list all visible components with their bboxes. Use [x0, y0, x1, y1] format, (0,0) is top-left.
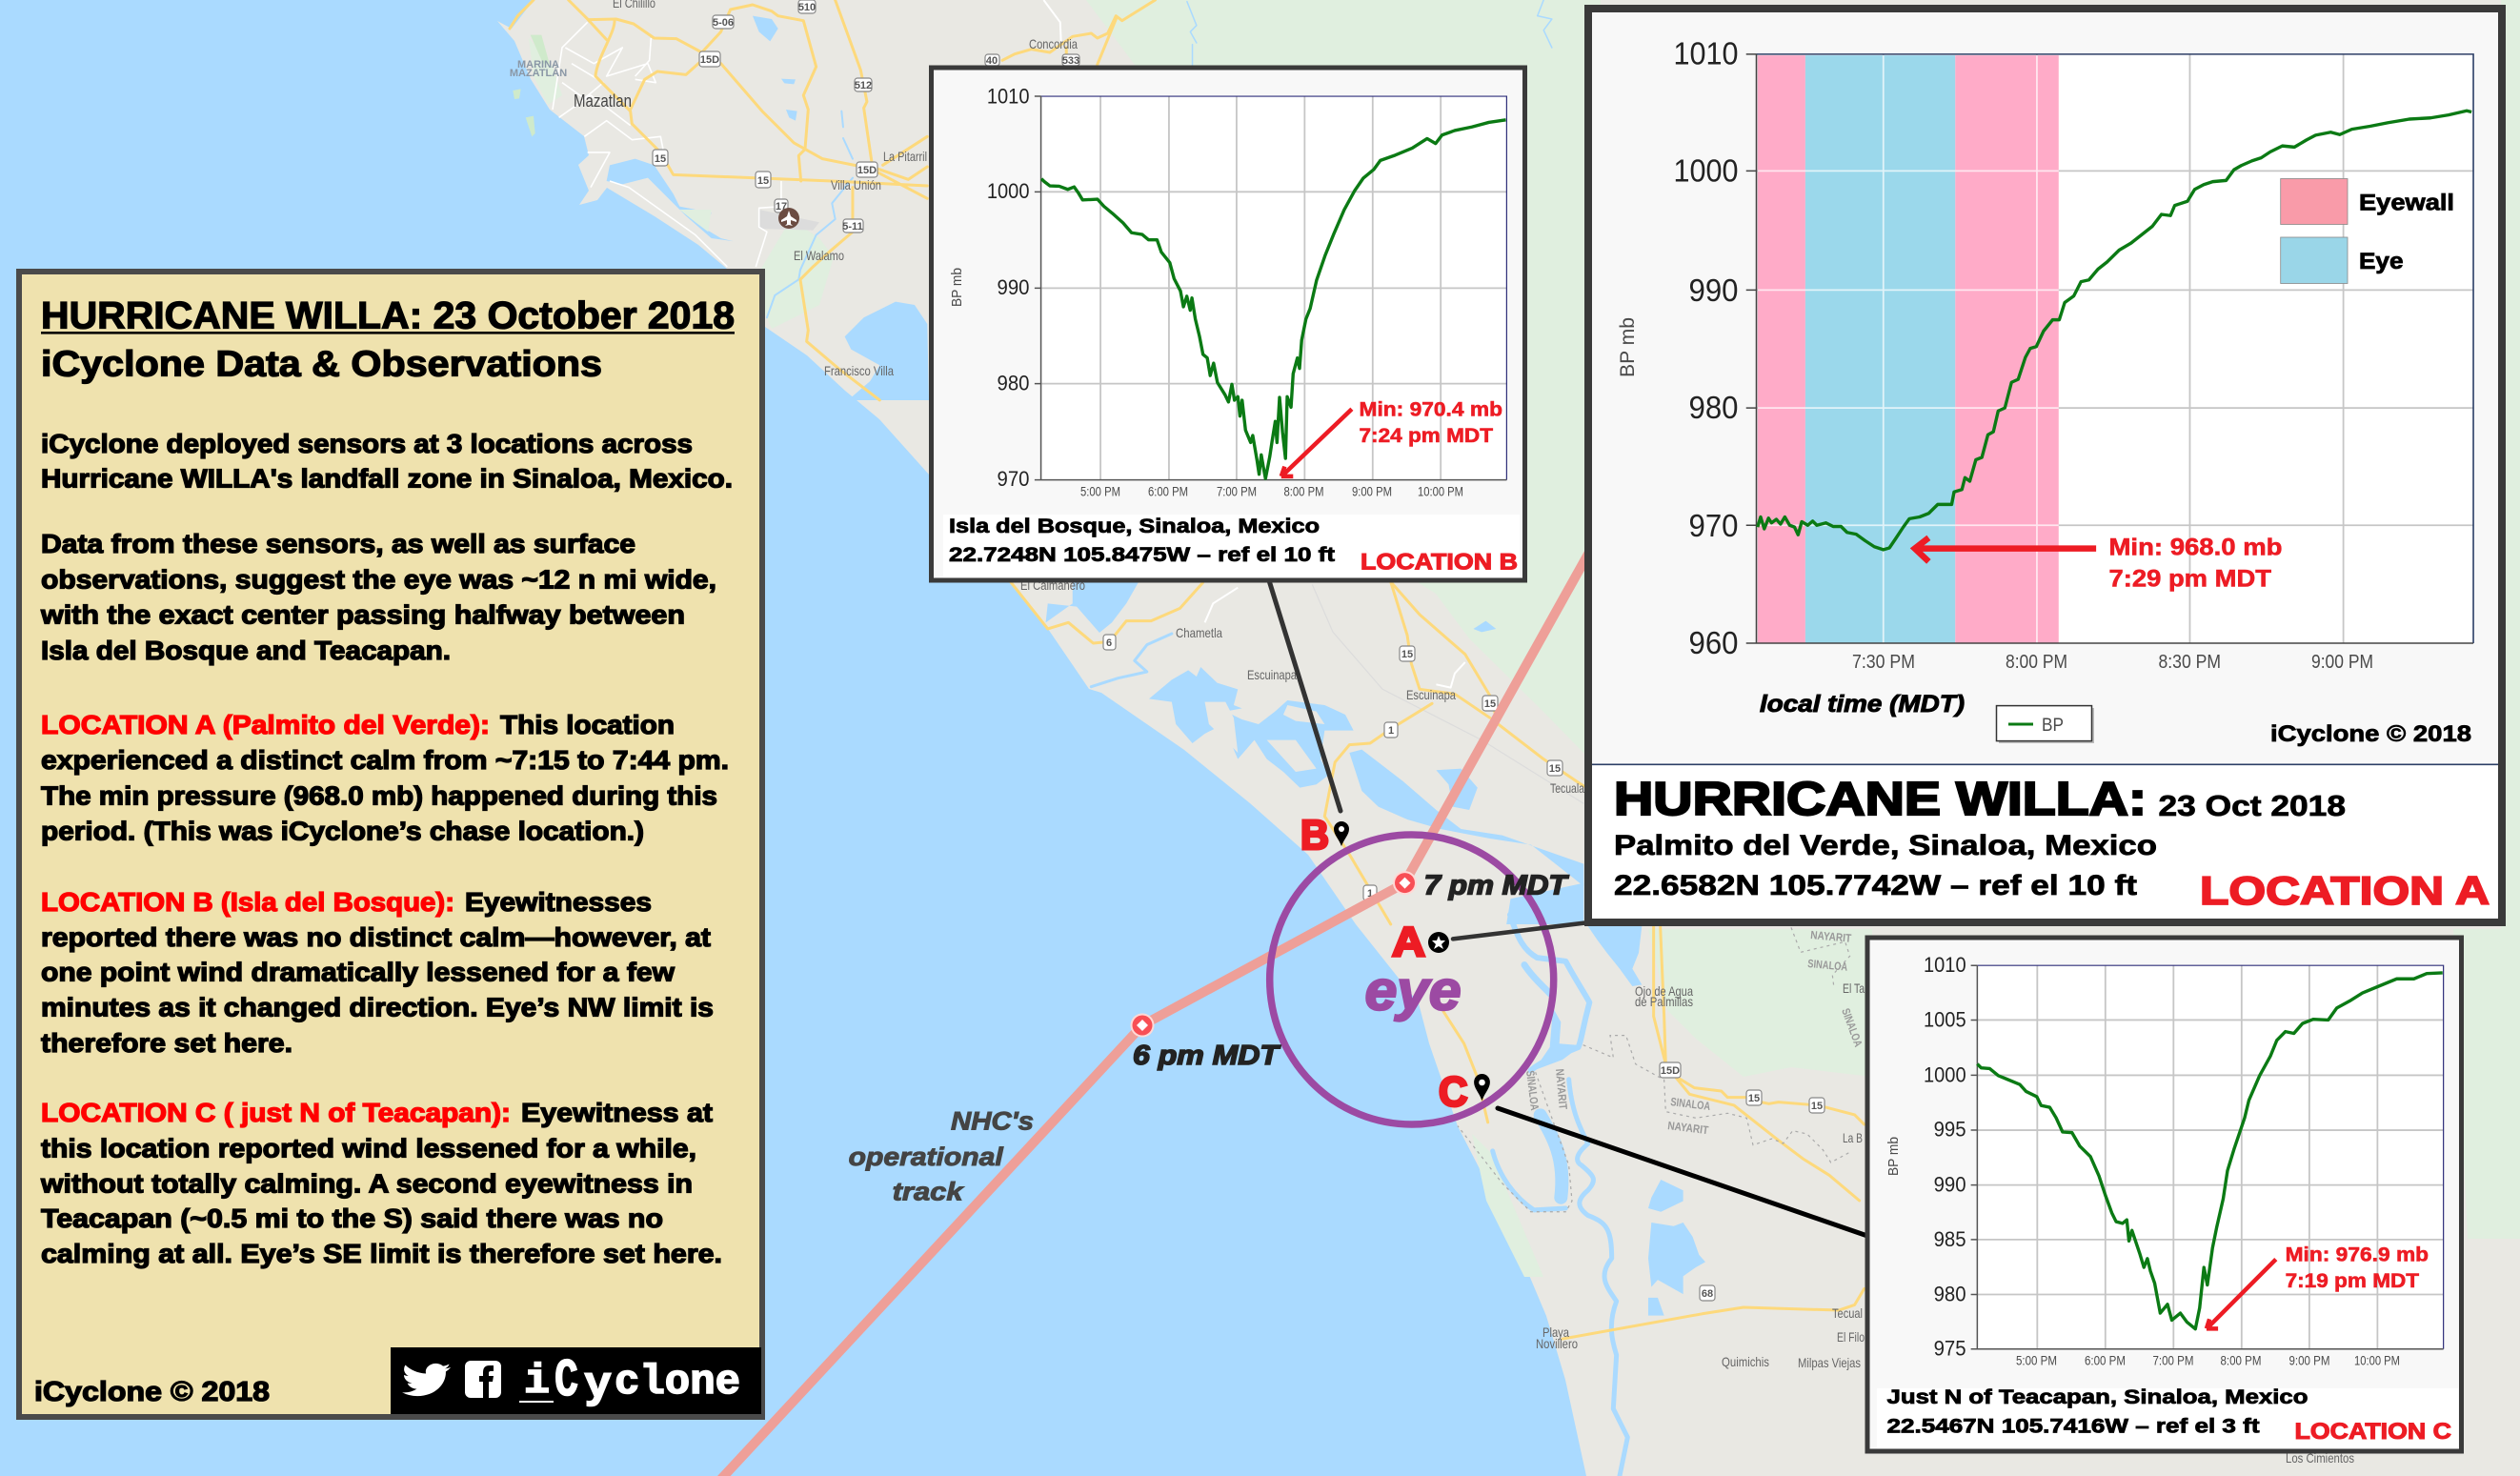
x axis labels: 10:00 PM	[1418, 484, 1463, 499]
location C paragraph: LOCATION C ( just N of Teacapan):	[41, 1098, 511, 1127]
x axis labels	[1080, 484, 1463, 499]
location C paragraph: this location reported wind lessened for a while,	[41, 1134, 696, 1163]
map place labels: Tecuala	[1550, 780, 1584, 796]
location C marker: C	[1439, 1069, 1467, 1116]
map place labels: El Caimanero	[1020, 577, 1085, 593]
map place labels: Concordia	[1029, 36, 1078, 51]
map place labels: Playa	[1542, 1324, 1569, 1340]
location B paragraph	[41, 887, 714, 1058]
location B marker: B	[1300, 812, 1329, 859]
legend: eye	[2281, 237, 2403, 284]
x axis labels: 8:00 PM	[2220, 1353, 2262, 1368]
location B paragraph: one point wind dramatically lessened for a few	[41, 957, 675, 987]
arrow to minimum	[1915, 537, 2096, 561]
minimum pressure callout: Min: 968.0 mb	[2109, 534, 2283, 560]
map place labels: SINALOA	[1523, 1070, 1542, 1111]
chart title: HURRICANE WILLA:	[1614, 774, 2147, 825]
highway shields: 510	[798, 2, 816, 13]
y axis labels	[987, 84, 1029, 491]
y axis labels: 995	[1934, 1118, 1966, 1142]
map roads: Concordia area	[1002, 0, 1552, 65]
x axis labels: 5:00 PM	[1080, 484, 1120, 499]
panel: location C chart	[1867, 938, 2462, 1451]
chart title	[1614, 774, 2346, 825]
y axis labels	[1924, 953, 1966, 1361]
y axis labels: 1010	[1924, 953, 1966, 977]
station caption	[1886, 1386, 2308, 1438]
map place labels: SINALOA	[1807, 957, 1848, 974]
location C paragraph: Teacapan (~0.5 mi to the S) said there was no	[41, 1203, 663, 1233]
intro paragraph	[41, 429, 733, 494]
station caption: Isla del Bosque, Sinaloa, Mexico	[949, 516, 1320, 537]
highway shields: 15	[1811, 1101, 1823, 1112]
eyewall band	[1955, 55, 2059, 643]
map place labels: Chametla	[1176, 625, 1222, 640]
highway shields: 15	[1748, 1093, 1760, 1104]
eyewall band	[1758, 55, 1805, 643]
map place labels: NAYARIT	[1810, 928, 1852, 945]
eye size paragraph	[40, 529, 716, 665]
y axis labels: 980	[997, 372, 1029, 394]
legend: eyewall	[2281, 179, 2454, 225]
highway shields: 15D	[700, 54, 719, 66]
highway shields: 40	[986, 55, 998, 67]
x axis title: local time (MDT)	[1760, 691, 1965, 718]
y axis title: BP mb	[1886, 1137, 1902, 1176]
label: 7 pm MDT: 7 pm MDT	[1424, 871, 1569, 901]
eye size paragraph: Isla del Bosque and Teacapan.	[41, 636, 451, 665]
icon: twitter bird	[402, 1364, 451, 1396]
x axis labels: 8:30 PM	[2159, 652, 2221, 673]
y axis labels: 970	[1688, 508, 1738, 543]
map place labels: El Walamo	[794, 248, 844, 263]
panel title: HURRICANE WILLA: 23 October 2018	[41, 295, 735, 337]
label: 6 pm MDT: 6 pm MDT	[1133, 1041, 1281, 1071]
panel: iCyclone data and observations	[19, 272, 762, 1417]
minimum pressure callout	[2109, 534, 2283, 593]
y axis labels: 960	[1688, 625, 1738, 660]
y axis labels: 1010	[987, 84, 1029, 109]
minimum pressure callout: 7:29 pm MDT	[2109, 566, 2271, 593]
minimum pressure callout: Min: 970.4 mb	[1359, 399, 1502, 421]
highway shields: 15	[757, 175, 769, 187]
chart legend: BP	[1997, 706, 2094, 743]
icon: facebook	[465, 1361, 501, 1398]
intro paragraph: Hurricane WILLA's landfall zone in Sinaloa, Mexico.	[41, 463, 733, 494]
location A marker: A	[1392, 919, 1425, 965]
minimum pressure callout	[1359, 399, 1502, 447]
x axis labels: 9:00 PM	[1352, 484, 1392, 499]
location A tag: LOCATION A	[2200, 868, 2490, 913]
label: NHC's operational track: track	[893, 1178, 965, 1206]
chart copyright: iCyclone © 2018	[2270, 721, 2471, 747]
x axis labels: 7:00 PM	[1217, 484, 1257, 499]
map place labels: MARINA	[517, 59, 559, 71]
leader line to location B	[1268, 577, 1341, 811]
plot area	[1971, 965, 2444, 1349]
map place labels: Escuinapa	[1247, 667, 1297, 682]
chart legend: BP: BP	[2042, 716, 2064, 736]
eye circle	[1270, 835, 1554, 1124]
highway shields: 1	[1367, 888, 1373, 900]
location B paragraph: therefore set here.	[41, 1028, 292, 1058]
copyright: iCyclone © 2018	[34, 1377, 270, 1407]
y axis labels: 1000	[1924, 1062, 1966, 1086]
water: Nayarit rivers and lakes	[1443, 915, 1865, 1476]
highway shields: 1	[1388, 725, 1394, 737]
iCyclone wordmark: y	[584, 1361, 612, 1410]
highway shields: 15	[655, 153, 666, 165]
station caption: 22.6582N 105.7742W – ref el 10 ft	[1614, 870, 2137, 901]
station caption: 22.5467N 105.7416W – ref el 3 ft	[1886, 1416, 2260, 1438]
highway shields: 512	[855, 80, 872, 91]
map place labels: La Pitarril	[883, 149, 927, 164]
minimum pressure callout: 7:24 pm MDT	[1359, 425, 1493, 447]
station caption: Palmito del Verde, Sinaloa, Mexico	[1614, 830, 2157, 861]
map place labels	[510, 0, 2354, 1466]
marker: 6 pm track point	[1130, 1014, 1155, 1037]
y axis labels: 1005	[1924, 1008, 1966, 1031]
y axis labels	[1673, 36, 1738, 660]
map roads: Mazatlan area	[510, 0, 927, 400]
eye size paragraph: observations, suggest the eye was ~12 n mi wide,	[41, 564, 716, 595]
label: eye: eye	[1365, 960, 1462, 1021]
highway shields: 15D	[857, 165, 877, 176]
y axis labels: 985	[1934, 1227, 1966, 1251]
highway shields: 5-06	[713, 17, 734, 29]
y axis labels: 1000	[1673, 153, 1738, 189]
y axis labels: 970	[997, 467, 1029, 491]
map place labels: de Palmillas	[1635, 994, 1693, 1009]
location C paragraph: without totally calming. A second eyewitness in	[40, 1169, 693, 1199]
y axis title: BP mb	[1617, 317, 1639, 377]
map place labels: Tecual	[1832, 1305, 1863, 1321]
location B paragraph: LOCATION B (Isla del Bosque):	[41, 887, 454, 917]
y axis labels: 990	[997, 275, 1029, 299]
location C paragraph: calming at all. Eye’s SE limit is therefore set here.	[41, 1239, 722, 1268]
legend: eyewall: Eyewall	[2359, 191, 2454, 216]
x axis labels	[1852, 652, 2373, 673]
highway shields: 15	[1549, 763, 1561, 775]
station caption	[1614, 830, 2157, 901]
location B paragraph: Eyewitnesses	[465, 887, 652, 917]
x axis labels: 9:00 PM	[2288, 1353, 2330, 1368]
map place labels: NAYARIT	[1667, 1119, 1710, 1137]
highway shields: 6	[1106, 637, 1112, 649]
x axis labels: 9:00 PM	[2311, 652, 2373, 673]
y axis labels: 980	[1688, 390, 1738, 425]
map place labels: SINALOA	[1670, 1095, 1711, 1113]
y axis labels: 975	[1934, 1337, 1966, 1361]
arrow to minimum	[2207, 1260, 2276, 1328]
plot area	[1746, 54, 2473, 643]
highway shields: 68	[1702, 1288, 1713, 1300]
highway shields	[653, 0, 1824, 1301]
forest terrain	[529, 0, 2520, 1277]
x axis labels: 6:00 PM	[2085, 1353, 2126, 1368]
location B tag: LOCATION B	[1361, 549, 1518, 576]
water: Escuinapa lagoons	[1011, 582, 1583, 924]
marker: 7 pm track point	[1393, 871, 1417, 895]
leader line to location A	[1453, 922, 1589, 939]
map place labels: Novillero	[1536, 1336, 1578, 1351]
location C tag: LOCATION C	[2294, 1419, 2451, 1445]
x axis labels: 8:00 PM	[1284, 484, 1324, 499]
highway shields: 15	[1484, 698, 1496, 710]
icon: airport	[778, 208, 799, 229]
highway shields: 533	[1062, 55, 1079, 67]
map place labels: Francisco Villa	[824, 363, 894, 378]
location C marker	[1439, 1069, 1490, 1116]
y axis labels: 1000	[987, 179, 1029, 203]
iCyclone wordmark: clone	[615, 1359, 740, 1406]
map place labels: Los Cimientos	[2286, 1450, 2354, 1466]
pressure curve	[1041, 120, 1505, 478]
map place labels: Mazatlan	[574, 91, 632, 111]
map place labels: NAYARIT	[1553, 1068, 1570, 1111]
x axis labels: 7:00 PM	[2153, 1353, 2193, 1368]
x axis labels: 7:30 PM	[1852, 652, 1915, 673]
station caption: 22.7248N 105.8475W – ref el 10 ft	[949, 544, 1335, 566]
map place labels: Escuinapa	[1406, 687, 1456, 702]
minimum pressure callout: 7:19 pm MDT	[2286, 1270, 2419, 1292]
map roads: east of the lagoon	[1583, 926, 1865, 1201]
map place labels: MAZATLÁN	[510, 67, 567, 79]
highway shields: 5-11	[842, 221, 863, 233]
location C paragraph	[40, 1098, 722, 1268]
map place labels: Milpas Viejas	[1798, 1355, 1861, 1370]
social logo bar	[391, 1347, 761, 1414]
eye band	[1805, 55, 1955, 643]
y axis labels: 990	[1934, 1172, 1966, 1196]
location A marker	[1392, 919, 1449, 965]
y axis labels: 1010	[1673, 36, 1738, 71]
station caption	[949, 516, 1335, 566]
iCyclone wordmark: i	[524, 1358, 550, 1405]
iCyclone wordmark: C	[554, 1350, 578, 1411]
leader line to location C	[1498, 1108, 1867, 1236]
x axis labels: 5:00 PM	[2016, 1353, 2057, 1368]
map place labels: La B	[1843, 1130, 1863, 1145]
panel: location A chart	[1588, 9, 2502, 922]
map place labels: SINALOA	[1839, 1006, 1865, 1049]
x axis labels: 8:00 PM	[2006, 652, 2067, 673]
label: NHC's operational track: NHC's	[951, 1107, 1034, 1136]
x axis labels	[2016, 1353, 2400, 1368]
map place labels: Quimichis	[1722, 1354, 1769, 1369]
label: NHC's operational track	[849, 1107, 1034, 1206]
chart title: 23 Oct 2018	[2159, 789, 2346, 822]
y axis labels: 980	[1934, 1283, 1966, 1305]
plot area	[1035, 96, 1506, 480]
highway shields: 17	[776, 201, 787, 212]
panel: location B chart	[932, 68, 1524, 580]
panel subtitle: iCyclone Data & Observations	[41, 344, 602, 384]
map place labels: El Filo	[1837, 1329, 1865, 1345]
pressure curve	[1758, 111, 2471, 550]
pressure curve	[1977, 973, 2443, 1329]
eye size paragraph: Data from these sensors, as well as surface	[41, 529, 635, 558]
minimum pressure callout	[2286, 1243, 2429, 1292]
map place labels: Ojo de Agua	[1635, 983, 1693, 999]
x axis labels: 10:00 PM	[2354, 1353, 2400, 1368]
label: NHC's operational track: operational	[849, 1142, 1003, 1171]
station caption: Just N of Teacapan, Sinaloa, Mexico	[1886, 1386, 2308, 1408]
location B paragraph: minutes as it changed direction. Eye’s NW limit is	[41, 993, 714, 1022]
y axis labels: 990	[1688, 273, 1738, 308]
minimum pressure callout: Min: 976.9 mb	[2286, 1243, 2429, 1265]
location A paragraph: This location	[500, 710, 675, 739]
x axis labels: 6:00 PM	[1148, 484, 1188, 499]
location A paragraph: period. (This was iCyclone’s chase location.)	[41, 817, 644, 846]
y axis title: BP mb	[950, 268, 965, 307]
highway shields: 15D	[1661, 1065, 1680, 1077]
map place labels: El Ta	[1843, 981, 1865, 996]
legend: eye: Eye	[2359, 249, 2403, 274]
location A paragraph: The min pressure (968.0 mb) happened during this	[41, 780, 717, 810]
map place labels: Villa Unión	[831, 177, 881, 192]
iCyclone wordmark	[519, 1350, 740, 1411]
location A paragraph: experienced a distinct calm from ~7:15 to 7:44 pm.	[41, 745, 729, 775]
water: Mazatlan lagoons	[513, 16, 929, 400]
location B marker	[1300, 812, 1349, 859]
location A paragraph: LOCATION A (Palmito del Verde):	[41, 710, 490, 739]
location B paragraph: reported there was no distinct calm—however, at	[41, 922, 711, 952]
location A paragraph	[41, 710, 729, 846]
arrow to minimum	[1281, 409, 1352, 476]
location C paragraph: Eyewitness at	[521, 1098, 713, 1127]
NHC operational track line	[710, 532, 1601, 1476]
highway shields: 15	[1401, 649, 1413, 660]
intro paragraph: iCyclone deployed sensors at 3 locations across	[41, 429, 693, 458]
eye size paragraph: with the exact center passing halfway between	[40, 600, 685, 630]
